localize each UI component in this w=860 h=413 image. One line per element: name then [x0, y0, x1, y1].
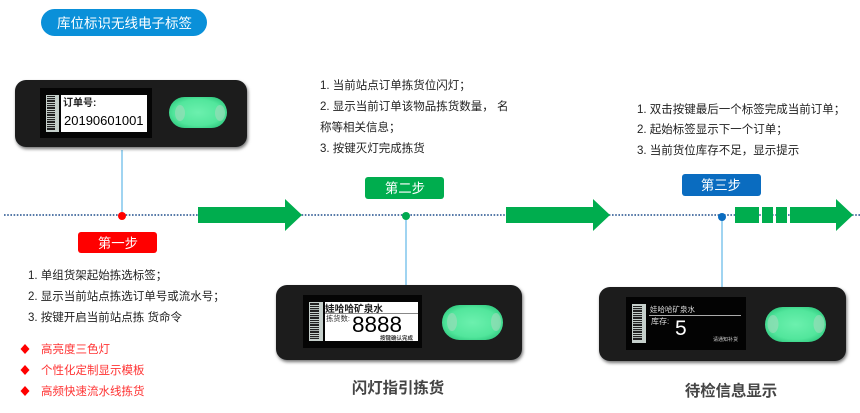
timeline dotted line — [4, 214, 860, 216]
device 2 caption: 闪灯指引拣货 — [352, 378, 444, 397]
device 1: order number tag: 20190601001 — [64, 113, 144, 128]
device 2: picking tag: 拣货数: — [326, 314, 350, 323]
feature list in red — [20, 342, 145, 398]
connector line step 3 — [721, 217, 723, 287]
step 1 text list: 1. 单组货架起始拣选标签； — [28, 268, 167, 282]
title pill: 库位标识无线电子标签 — [57, 15, 192, 31]
timeline node: step 3 — [718, 213, 726, 221]
device 2: picking tag: 娃哈哈矿泉水 — [325, 302, 383, 315]
connector line step 1 — [121, 150, 123, 215]
step 3 text list: 2. 起始标签显示下一个订单； — [637, 122, 788, 136]
step 3 badge — [682, 174, 761, 196]
device 1: order number tag: 订单号: — [63, 96, 96, 109]
step 2 badge: 第二步 — [385, 180, 425, 196]
step 3 text list — [637, 102, 845, 157]
step 1 text list — [28, 268, 225, 324]
feature list in red: 个性化定制显示模板 — [41, 363, 145, 377]
device 3: stock tag: 娃哈哈矿泉水 — [650, 304, 695, 314]
step 2 text list: 2. 显示当前订单该物品拣货数量， 名 — [320, 99, 508, 113]
step 1 badge — [78, 232, 157, 253]
arrow 3 segmented — [735, 199, 853, 231]
device 3 caption: 待检信息显示 — [685, 381, 777, 400]
device 3: stock tag: 请通知补货 — [713, 336, 738, 343]
step 2 text list: 3. 按键灭灯完成拣货 — [320, 141, 425, 155]
step 1 text list: 3. 按键开启当前站点拣 货命令 — [28, 310, 182, 324]
timeline node: step 1 — [118, 212, 126, 220]
feature list in red: 高亮度三色灯 — [41, 342, 110, 356]
step 2 text list: 称等相关信息； — [320, 120, 400, 134]
step 2 text list — [320, 78, 508, 155]
feature list in red: 高频快速流水线拣货 — [41, 384, 144, 398]
connector line step 2 — [405, 216, 407, 285]
arrow 1 — [198, 199, 302, 231]
device 3: stock tag: 库存: — [651, 316, 669, 326]
device 2: picking tag — [276, 285, 522, 360]
device 2: picking tag: 按键确认完成 — [380, 334, 414, 342]
arrow 2 — [506, 199, 610, 231]
device 2: picking tag: 8888 — [352, 312, 402, 337]
device 3: stock tag — [599, 287, 846, 361]
step 3 text list: 3. 当前货位库存不足，显示提示 — [637, 143, 799, 157]
title pill — [41, 9, 207, 36]
step 3 text list: 1. 双击按键最后一个标签完成当前订单； — [637, 102, 845, 116]
step 2 badge — [365, 177, 444, 199]
timeline node: step 2 — [402, 212, 410, 220]
step 1 text list: 2. 显示当前站点拣选订单号或流水号； — [28, 289, 225, 303]
step 3 badge: 第三步 — [701, 177, 741, 193]
step 1 badge: 第一步 — [98, 235, 138, 251]
device 3: stock tag: 5 — [675, 317, 687, 340]
device 1: order number tag — [15, 80, 247, 147]
step 2 text list: 1. 当前站点订单拣货位闪灯； — [320, 78, 471, 92]
